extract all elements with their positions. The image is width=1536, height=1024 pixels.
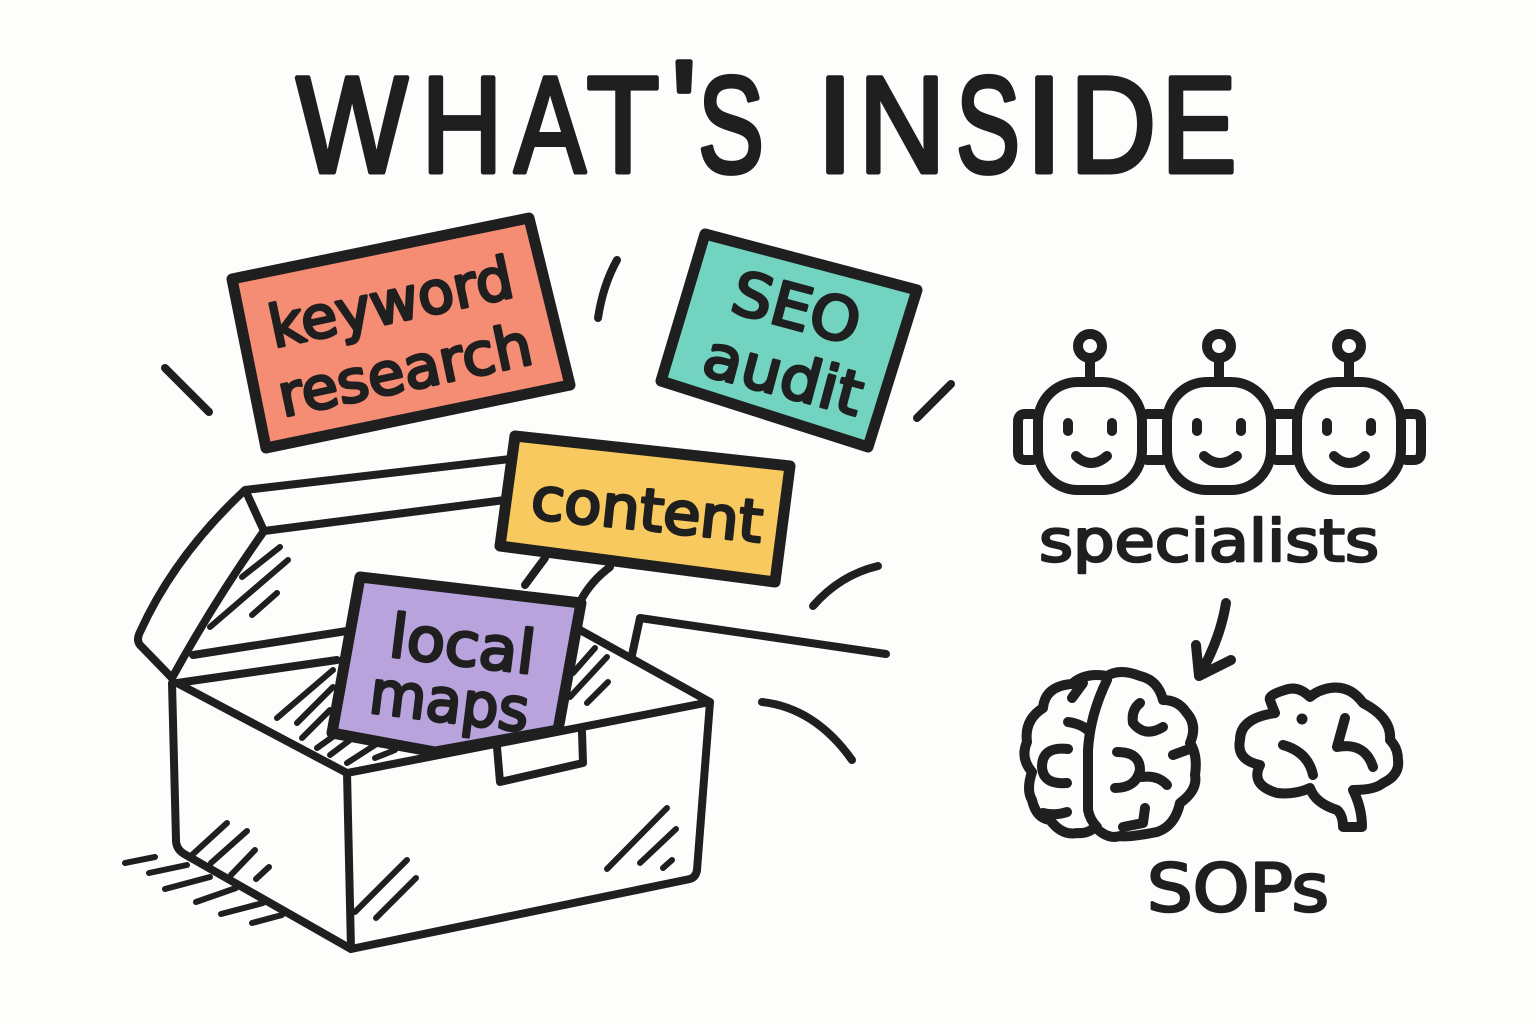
card: SEO audit: SEO xyxy=(724,258,868,359)
icon: side-view brain xyxy=(1239,688,1398,827)
title: S xyxy=(956,49,1020,202)
icon: three robot specialists xyxy=(1018,334,1421,490)
card: SEO audit: audit xyxy=(696,321,870,430)
title: T xyxy=(587,49,659,202)
title: A xyxy=(514,49,586,202)
motion lines xyxy=(165,260,951,760)
card: keyword research: keyword xyxy=(262,243,519,361)
title: E xyxy=(1162,48,1236,202)
title: D xyxy=(1070,49,1156,202)
title xyxy=(296,33,1236,202)
card: keyword research: research xyxy=(272,310,538,431)
box clasp tab xyxy=(497,732,583,782)
robot 1 xyxy=(1018,334,1142,490)
open box xyxy=(125,459,886,949)
robot 2 xyxy=(1147,334,1271,490)
card: content xyxy=(500,436,790,582)
title: ' xyxy=(671,33,697,186)
label: SOPs: SOPs xyxy=(1147,850,1329,927)
card: local maps: local xyxy=(386,602,539,689)
title: S xyxy=(698,49,764,202)
card: keyword research xyxy=(232,218,570,448)
box body xyxy=(125,618,886,949)
title: H xyxy=(421,48,503,202)
card: content: content xyxy=(528,464,766,556)
robot 3 xyxy=(1276,334,1421,490)
label: specialists: specialists xyxy=(1039,507,1379,575)
title: N xyxy=(858,49,946,202)
card: SEO audit xyxy=(661,234,917,447)
box lid xyxy=(138,459,510,683)
title: I xyxy=(816,49,854,202)
icon: front-view brain xyxy=(1024,672,1196,837)
title: I xyxy=(1025,49,1063,202)
arrow: specialists to SOPs xyxy=(1196,603,1231,676)
title: W xyxy=(296,49,408,202)
card: local maps xyxy=(332,577,581,752)
card: local maps: maps xyxy=(366,658,533,747)
card sticks xyxy=(525,558,610,602)
